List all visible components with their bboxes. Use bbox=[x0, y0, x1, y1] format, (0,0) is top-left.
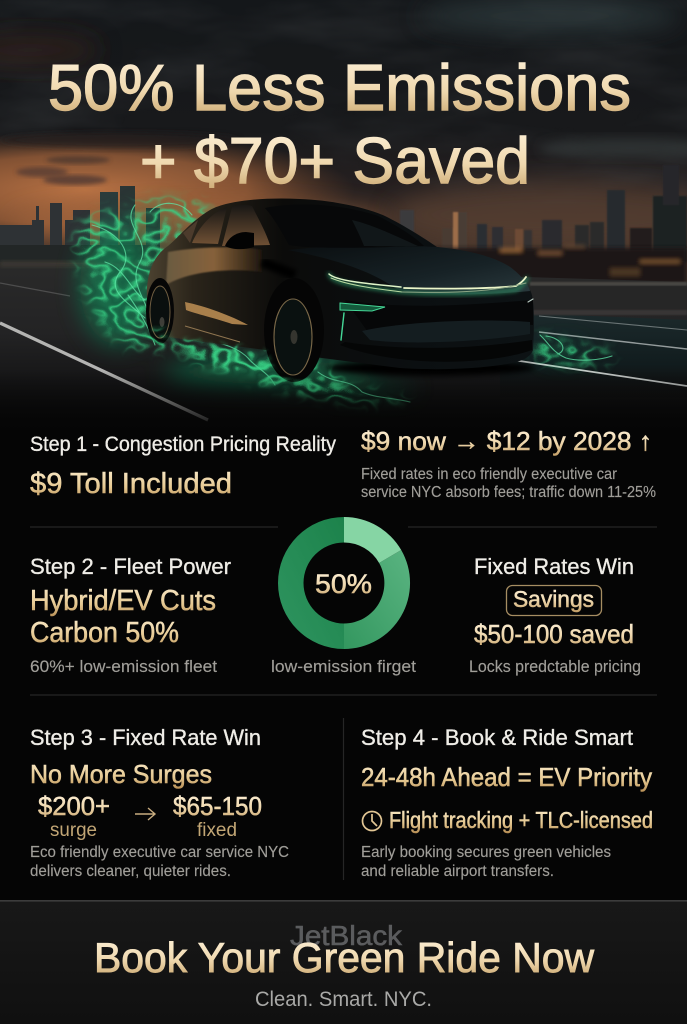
title: + $70+ Saved bbox=[140, 124, 530, 197]
toll headline: $9 Toll Included bbox=[30, 468, 232, 500]
panel: step 4 book and ride smart bbox=[361, 725, 653, 880]
step 3 heading: Step 3 - Fixed Rate Win bbox=[30, 725, 261, 750]
step 4 description: and reliable airport transfers. bbox=[361, 863, 554, 880]
surge price: surge bbox=[50, 820, 97, 841]
black sedan bbox=[146, 198, 535, 382]
call to action headline: Book Your Green Ride Now bbox=[94, 934, 595, 981]
step 1 description: service NYC absorb fees; traffic down 11-25% bbox=[361, 484, 656, 501]
panel: fixed rates win bbox=[469, 554, 641, 676]
icon: clock bbox=[362, 812, 382, 830]
savings amount: $50-100 saved bbox=[474, 619, 634, 649]
panel: footer call to action bbox=[0, 900, 687, 1024]
side mirror bbox=[225, 232, 254, 249]
panel: step 1 congestion pricing bbox=[30, 426, 656, 501]
carbon headline: Carbon 50% bbox=[30, 617, 179, 649]
bright flame strokes bbox=[92, 203, 612, 402]
step 4 description bbox=[361, 844, 611, 880]
fleet note: 60%+ low-emission fleet bbox=[30, 657, 217, 676]
step 3 description: delivers cleaner, quieter rides. bbox=[30, 863, 231, 880]
carbon headline: Hybrid/EV Cuts bbox=[30, 585, 216, 617]
fixed price bbox=[173, 791, 262, 841]
LED headlight strip bbox=[329, 274, 527, 294]
windshield bbox=[265, 205, 424, 248]
pricing note: Locks predctable pricing bbox=[469, 657, 641, 676]
hood and front fascia bbox=[288, 245, 530, 294]
flight tracking line: Flight tracking + TLC-licensed bbox=[389, 807, 653, 833]
tagline: Clean. Smart. NYC. bbox=[255, 988, 432, 1011]
flames in front of wheels bbox=[148, 330, 345, 396]
side windows bbox=[183, 205, 270, 246]
step 1 description bbox=[361, 466, 656, 501]
no surges headline: No More Surges bbox=[30, 759, 212, 789]
step 2 heading: Step 2 - Fleet Power bbox=[30, 554, 231, 579]
donut value: 50% bbox=[315, 569, 372, 599]
brand name: JetBlack bbox=[290, 920, 403, 951]
step 3 description: Eco friendly executive car service NYC bbox=[30, 844, 289, 861]
rear wheel bbox=[146, 278, 174, 344]
step 1 heading: Step 1 - Congestion Pricing Reality bbox=[30, 433, 336, 456]
title: 50% Less Emissions bbox=[48, 51, 631, 124]
flame wisps bbox=[75, 199, 612, 404]
body reflections bbox=[166, 247, 295, 342]
surge price: $200+ bbox=[38, 791, 110, 821]
city skyline bbox=[0, 165, 687, 284]
title bbox=[48, 51, 631, 197]
savings badge: Savings bbox=[513, 586, 594, 612]
donut chart 50% bbox=[271, 517, 416, 676]
surge price bbox=[38, 791, 110, 841]
front wheel bbox=[264, 278, 324, 382]
underbody shadow bbox=[325, 360, 535, 376]
fixed price: fixed bbox=[197, 820, 237, 841]
arrow bbox=[135, 808, 155, 820]
step 3 description bbox=[30, 844, 289, 880]
panel: step 2 fleet power bbox=[30, 554, 231, 676]
green fog light bbox=[340, 299, 533, 340]
step 4 description: Early booking secures green vehicles bbox=[361, 844, 611, 861]
fixed rates heading: Fixed Rates Win bbox=[474, 554, 634, 579]
fixed price: $65-150 bbox=[173, 791, 262, 821]
toll increase: $9 now → $12 by 2028 ↑ bbox=[361, 426, 652, 456]
car body bbox=[147, 198, 534, 369]
step 1 description: Fixed rates in eco friendly executive car bbox=[361, 466, 618, 483]
priority headline: 24-48h Ahead = EV Priority bbox=[361, 762, 652, 792]
donut caption: low-emission firget bbox=[271, 657, 416, 676]
flame glow bbox=[80, 206, 586, 394]
green energy flames bbox=[75, 199, 612, 404]
carbon headline bbox=[30, 585, 216, 649]
divider lines bbox=[30, 527, 657, 880]
step 4 heading: Step 4 - Book & Ride Smart bbox=[361, 725, 633, 750]
road surface bbox=[0, 261, 687, 440]
panel: step 3 fixed rate win bbox=[30, 725, 289, 880]
sky with sunset clouds bbox=[0, 0, 687, 290]
fade to black bbox=[0, 370, 687, 432]
